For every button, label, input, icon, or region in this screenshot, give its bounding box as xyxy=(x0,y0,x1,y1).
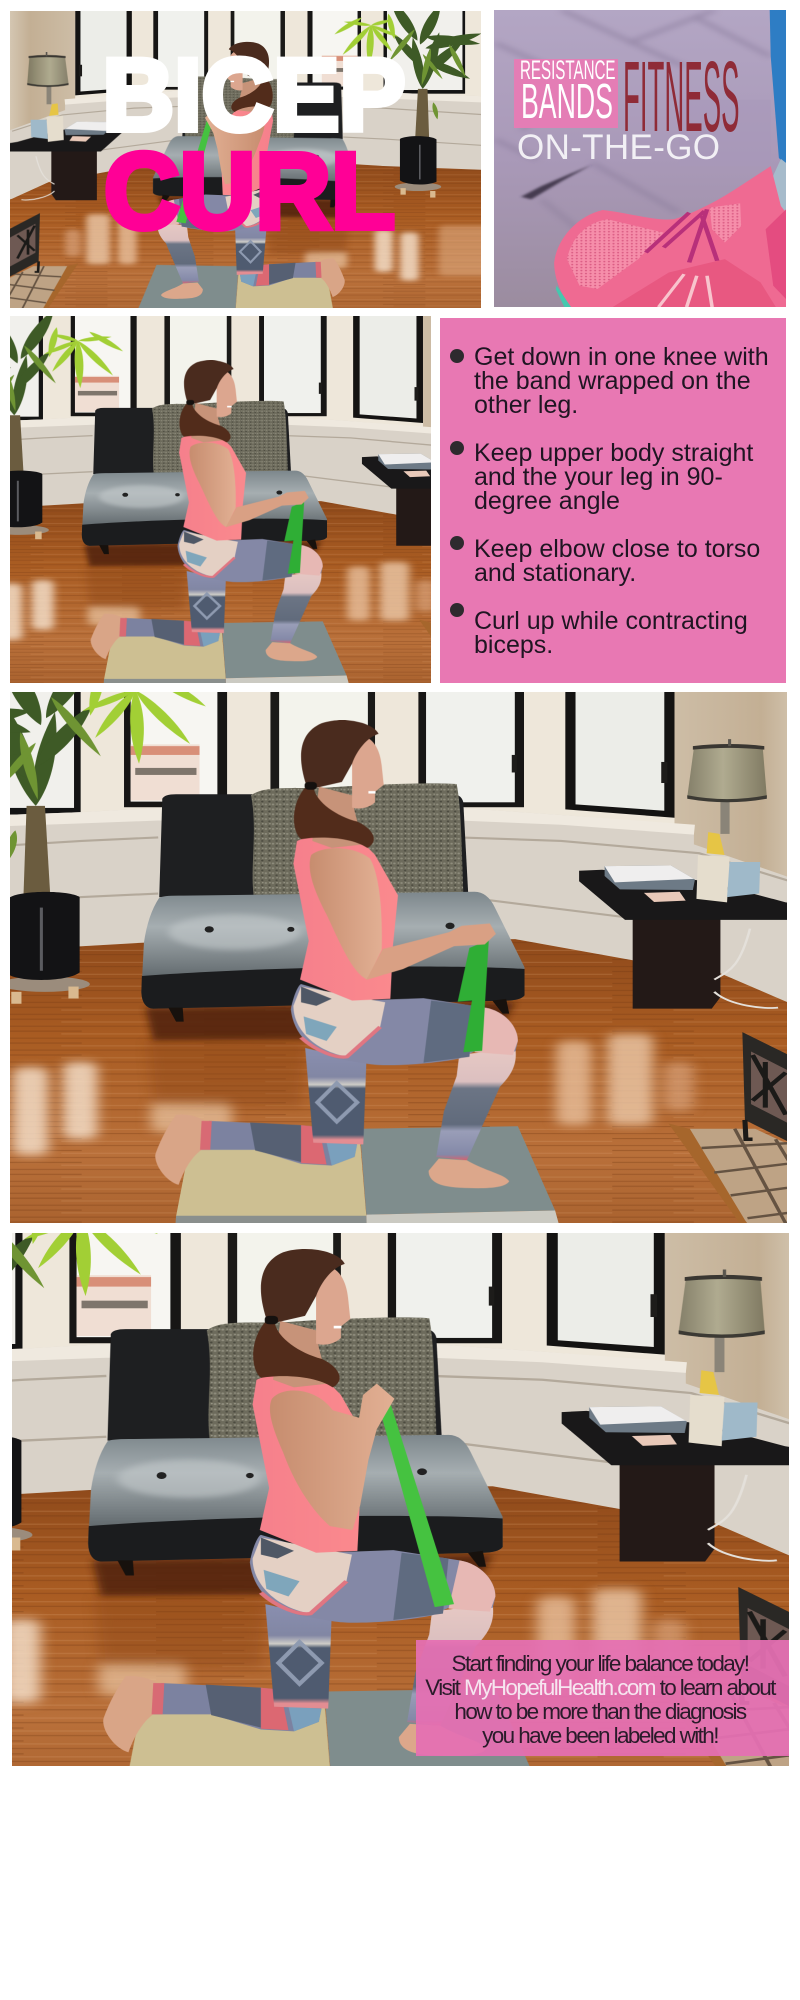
step 4 text xyxy=(474,607,748,659)
step 4 text: Curl up while contracting xyxy=(474,607,748,635)
photo: woman kneeling, top of curl xyxy=(10,11,481,308)
room background xyxy=(0,585,800,1269)
callout text xyxy=(425,1651,776,1748)
photo: woman kneeling, band low xyxy=(10,316,782,1000)
plant xyxy=(0,639,209,1004)
logo word BANDS: BANDS xyxy=(521,75,613,129)
title word CURL: CURL xyxy=(104,130,395,251)
plant xyxy=(0,1161,162,1556)
panel: instructions xyxy=(440,318,786,683)
logo: Resistance Bands Fitness On-the-go xyxy=(514,41,740,167)
callout text: how to be more than the diagnosis xyxy=(454,1699,746,1724)
step 2 text: degree angle xyxy=(474,487,620,515)
step 2 text: Keep upper body straight xyxy=(474,439,753,467)
woman xyxy=(103,1249,495,1756)
step 3 text xyxy=(474,535,760,587)
jeans xyxy=(770,10,786,166)
photo: large view, band low xyxy=(10,692,787,1553)
step 2 text xyxy=(474,439,754,515)
arm and band xyxy=(310,848,496,1052)
step 4 text: biceps. xyxy=(474,631,553,659)
room background xyxy=(0,0,531,343)
arm and band xyxy=(270,1384,454,1607)
callout text: you have been labeled with! xyxy=(482,1723,718,1748)
step 1 text: the band wrapped on the xyxy=(474,367,751,395)
title word BICEP: BICEP xyxy=(102,38,406,152)
step 3 text: Keep elbow close to torso xyxy=(474,535,760,563)
bullet 3 xyxy=(450,536,464,550)
photo: large view, band curled up xyxy=(10,739,789,1766)
woman xyxy=(156,42,345,299)
plant xyxy=(333,0,483,198)
bullet 1 xyxy=(450,349,464,363)
step 1 text: other leg. xyxy=(474,391,578,419)
logo word RESISTANCE: RESISTANCE xyxy=(520,55,616,85)
woman xyxy=(155,720,518,1188)
step 2 text: and the your leg in 90- xyxy=(474,463,723,491)
arm and band xyxy=(190,443,309,574)
step 1 text xyxy=(10,316,769,446)
room background xyxy=(0,1102,800,1844)
photo: pink running shoe on paving xyxy=(494,10,786,307)
logo pink box xyxy=(514,59,618,128)
plant xyxy=(0,308,125,543)
bullet 2 xyxy=(450,441,464,455)
title xyxy=(102,38,732,298)
logo line ON-THE-GO: ON-THE-GO xyxy=(517,128,720,167)
step 3 text: and stationary. xyxy=(474,559,636,587)
shoe xyxy=(554,166,786,307)
room background xyxy=(0,273,546,713)
arm and band xyxy=(176,110,265,223)
callout text: Visit MyHopefulHealth.com to learn about xyxy=(425,1675,775,1700)
callout text: Start finding your life balance today! xyxy=(452,1651,748,1676)
bullet 4 xyxy=(450,603,464,617)
step 1 text: Get down in one knee with xyxy=(474,343,769,371)
woman xyxy=(91,360,323,661)
callout xyxy=(416,1640,789,1756)
